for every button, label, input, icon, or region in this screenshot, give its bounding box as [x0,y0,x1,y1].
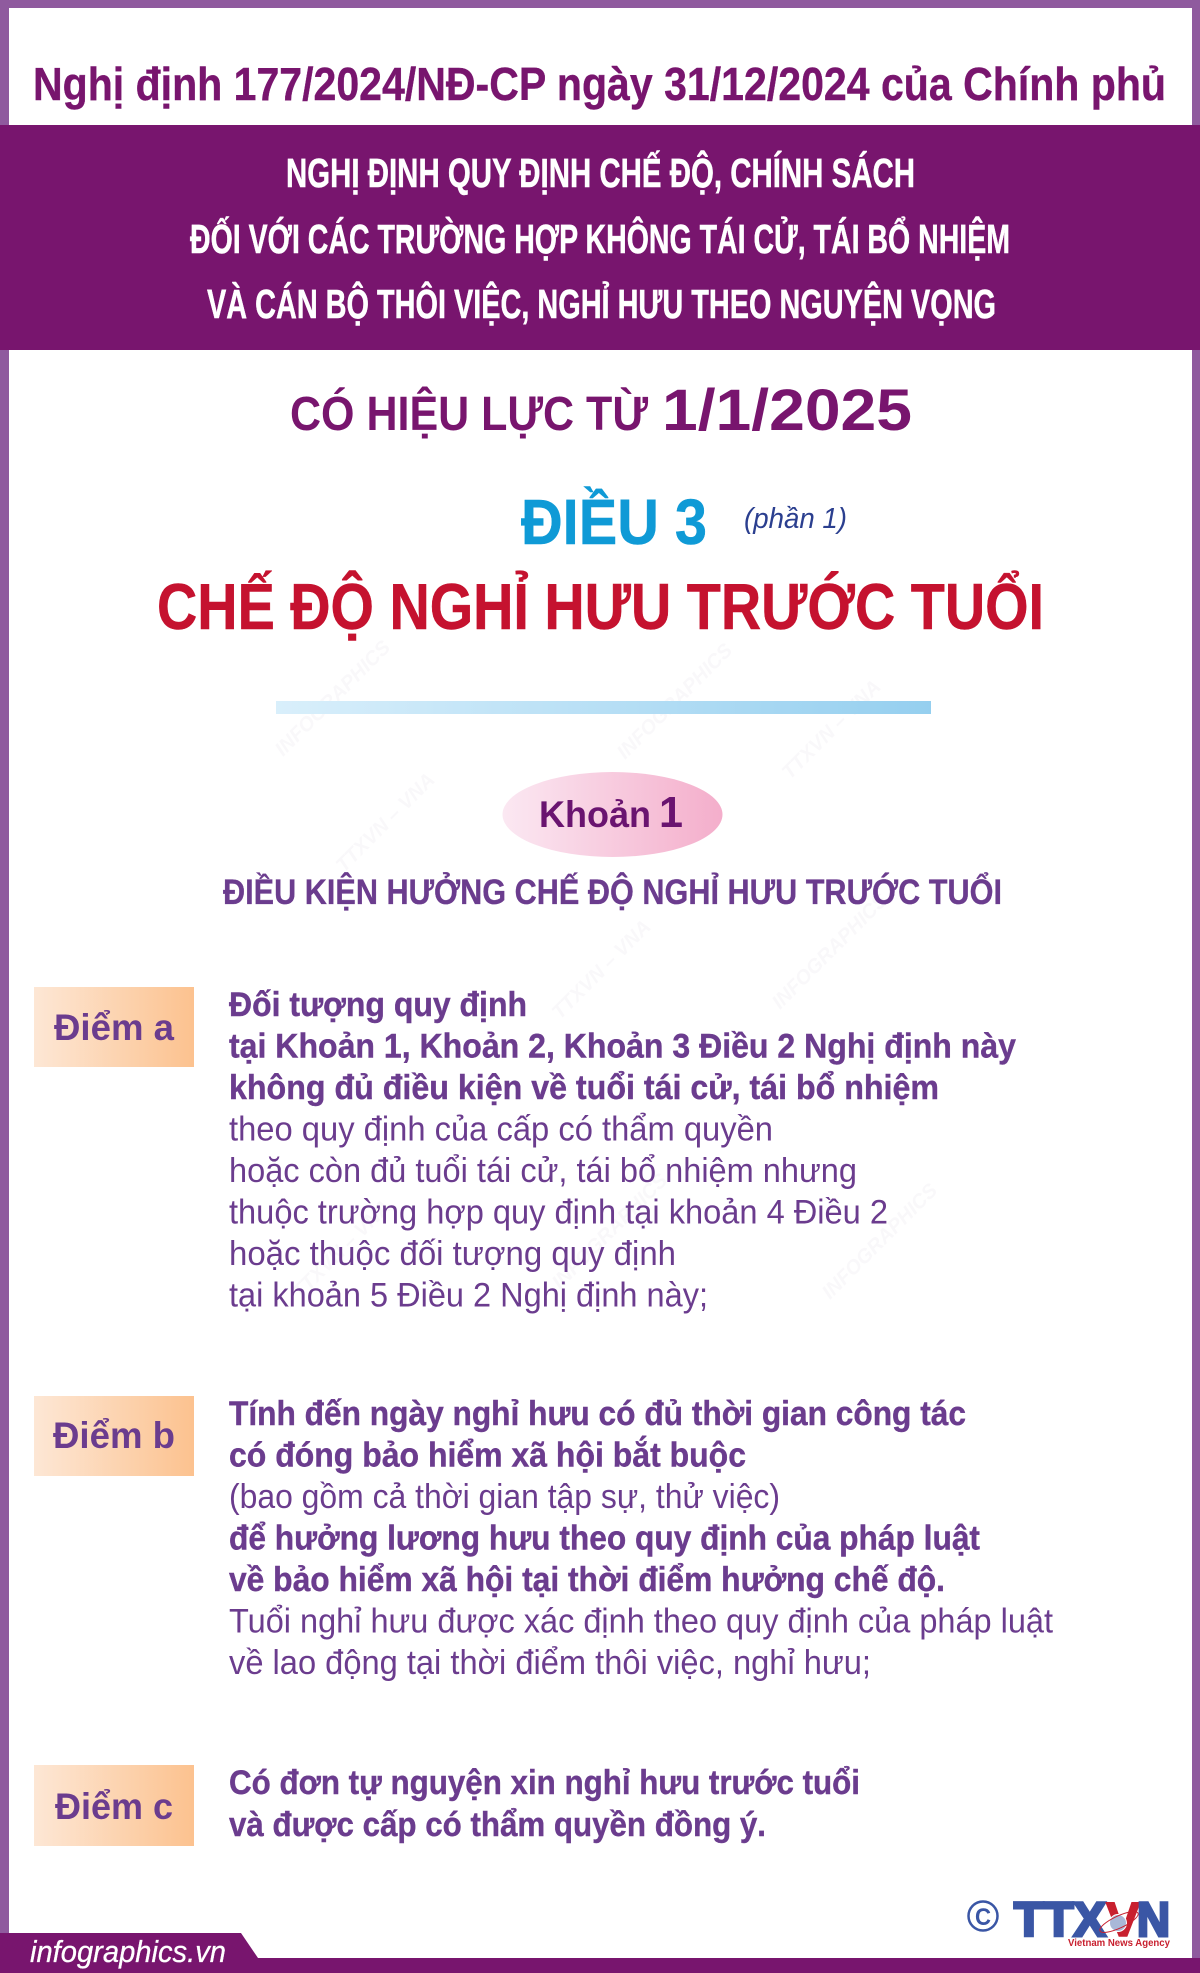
text block: Điểm a: Đối tượng quy định [229,986,527,1024]
effective date: CÓ HIỆU LỰC TỪ [290,386,648,441]
label: Điểm c: Điểm c [55,1786,173,1827]
text block: Điểm b: để hưởng lương hưu theo quy định của pháp luật [229,1520,980,1558]
text block: Điểm b: Tính đến ngày nghỉ hưu có đủ thời gian công tác [229,1395,966,1433]
text: TTXVN – VNA [548,916,655,1024]
label: Điểm a [34,987,194,1067]
subheading: ĐIỀU KIỆN HƯỞNG CHẾ ĐỘ NGHỈ HƯU TRƯỚC TUỔI [223,872,1002,912]
text block: Điểm a: không đủ điều kiện về tuổi tái cử, tái bổ nhiệm [229,1069,939,1107]
footer band: infographics.vn [30,1934,226,1969]
article heading: ĐIỀU 3 [521,486,707,558]
red heading: CHẾ ĐỘ NGHỈ HƯU TRƯỚC TUỔI [157,570,1044,643]
text block: Điểm b: về lao động tại thời điểm thôi việc, nghỉ hưu; [229,1644,871,1682]
article heading [521,486,847,558]
label: Điểm a: Điểm a [54,1007,174,1048]
text block: Điểm b: (bao gồm cả thời gian tập sự, thử việc) [229,1478,780,1516]
footer band [0,1933,1200,1973]
text: TTXVN – VNA [288,1196,395,1304]
text block: Điểm a: thuộc trường hợp quy định tại khoản 4 Điều 2 [229,1194,888,1232]
logo: TTXVN: V [1106,1894,1140,1947]
panel: Điểm a [34,986,1016,1314]
logo: TTXVN: TTX [1014,1894,1106,1947]
text: INFOGRAPHICS [548,1169,672,1294]
logo: TTXVN: C [975,1904,991,1931]
text: INFOGRAPHICS [818,1179,942,1304]
text: INFOGRAPHICS [271,636,395,761]
text: INFOGRAPHICS [768,889,892,1014]
text block: Điểm a: theo quy định của cấp có thẩm quyền [229,1110,773,1148]
label: Điểm c [34,1765,194,1846]
panel: Điểm b [34,1395,1054,1682]
text block: Điểm c: Có đơn tự nguyện xin nghỉ hưu trước tuổi [229,1764,860,1802]
text block: Điểm b: về bảo hiểm xã hội tại thời điểm hưởng chế độ. [229,1561,945,1599]
article heading: (phần 1) [744,503,847,535]
text: INFOGRAPHICS [613,639,737,764]
label: Điểm b [34,1396,194,1476]
panel: purple heading band [0,125,1200,350]
text block: Điểm b: Tuổi nghỉ hưu được xác định theo quy định của pháp luật [229,1602,1054,1640]
panel: purple heading band: NGHỊ ĐỊNH QUY ĐỊNH CHẾ ĐỘ, CHÍNH SÁCH [286,150,915,196]
text block: Điểm a: tại khoản 5 Điều 2 Nghị định này; [229,1276,708,1314]
text block: Điểm a [229,986,1016,1314]
text block: Điểm c [229,1764,860,1844]
logo: TTXVN: Vietnam News Agency [1068,1937,1170,1949]
badge: Khoản 1 [502,772,722,857]
badge: Khoản 1: Khoản [539,794,651,835]
effective date: 1/1/2025 [662,378,912,443]
logo: TTXVN [968,1894,1170,1949]
effective date [290,378,912,443]
text: TTXVN – VNA [778,676,885,784]
text: TTXVN – VNA [332,769,439,877]
text block: Điểm a: tại Khoản 1, Khoản 2, Khoản 3 Điều 2 Nghị định này [229,1028,1016,1066]
text block: Điểm b [229,1395,1054,1682]
text block: Điểm c: và được cấp có thẩm quyền đồng ý. [229,1806,766,1844]
badge: Khoản 1: 1 [659,788,683,837]
text block: Điểm a: hoặc thuộc đối tượng quy định [229,1235,676,1273]
text block: Điểm b: có đóng bảo hiểm xã hội bắt buộc [229,1436,746,1474]
blue divider bar [276,701,931,714]
label: Điểm b: Điểm b [53,1415,175,1456]
panel: Điểm c [34,1764,860,1846]
text block: Điểm a: hoặc còn đủ tuổi tái cử, tái bổ nhiệm nhưng [229,1152,857,1190]
logo: TTXVN: N [1137,1894,1170,1947]
